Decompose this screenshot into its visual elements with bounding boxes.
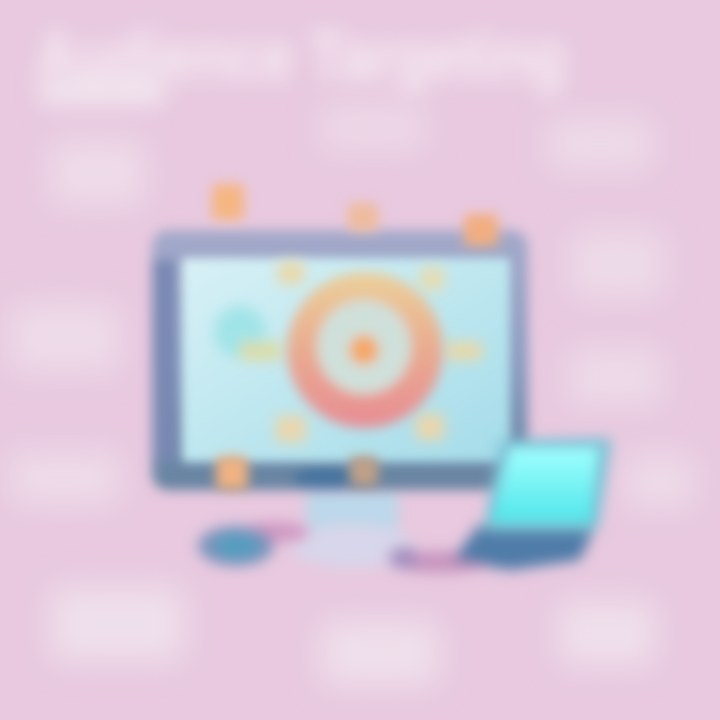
text block: top right	[548, 118, 653, 170]
text block: bottom centre	[320, 620, 440, 686]
icon: mouse	[198, 522, 309, 566]
text block: top left	[50, 140, 145, 206]
text block: middle left	[10, 304, 120, 372]
monitor screen	[182, 258, 510, 462]
text block: bottom left	[50, 586, 185, 662]
target icon	[287, 272, 443, 428]
monitor frame	[152, 230, 528, 490]
orange markers	[212, 184, 498, 490]
text block: middle right upper	[570, 230, 665, 298]
monitor stand	[292, 490, 412, 568]
text block: lower left	[10, 452, 120, 504]
screen accents	[214, 262, 482, 442]
title: Audience Targeting	[36, 17, 566, 95]
icon: laptop	[389, 438, 612, 573]
text block: top centre	[320, 105, 425, 151]
text block: middle right lower	[568, 348, 663, 406]
text block: bottom right	[558, 600, 656, 666]
icon: laptop screen	[492, 448, 598, 522]
text block: lower right	[625, 454, 695, 508]
